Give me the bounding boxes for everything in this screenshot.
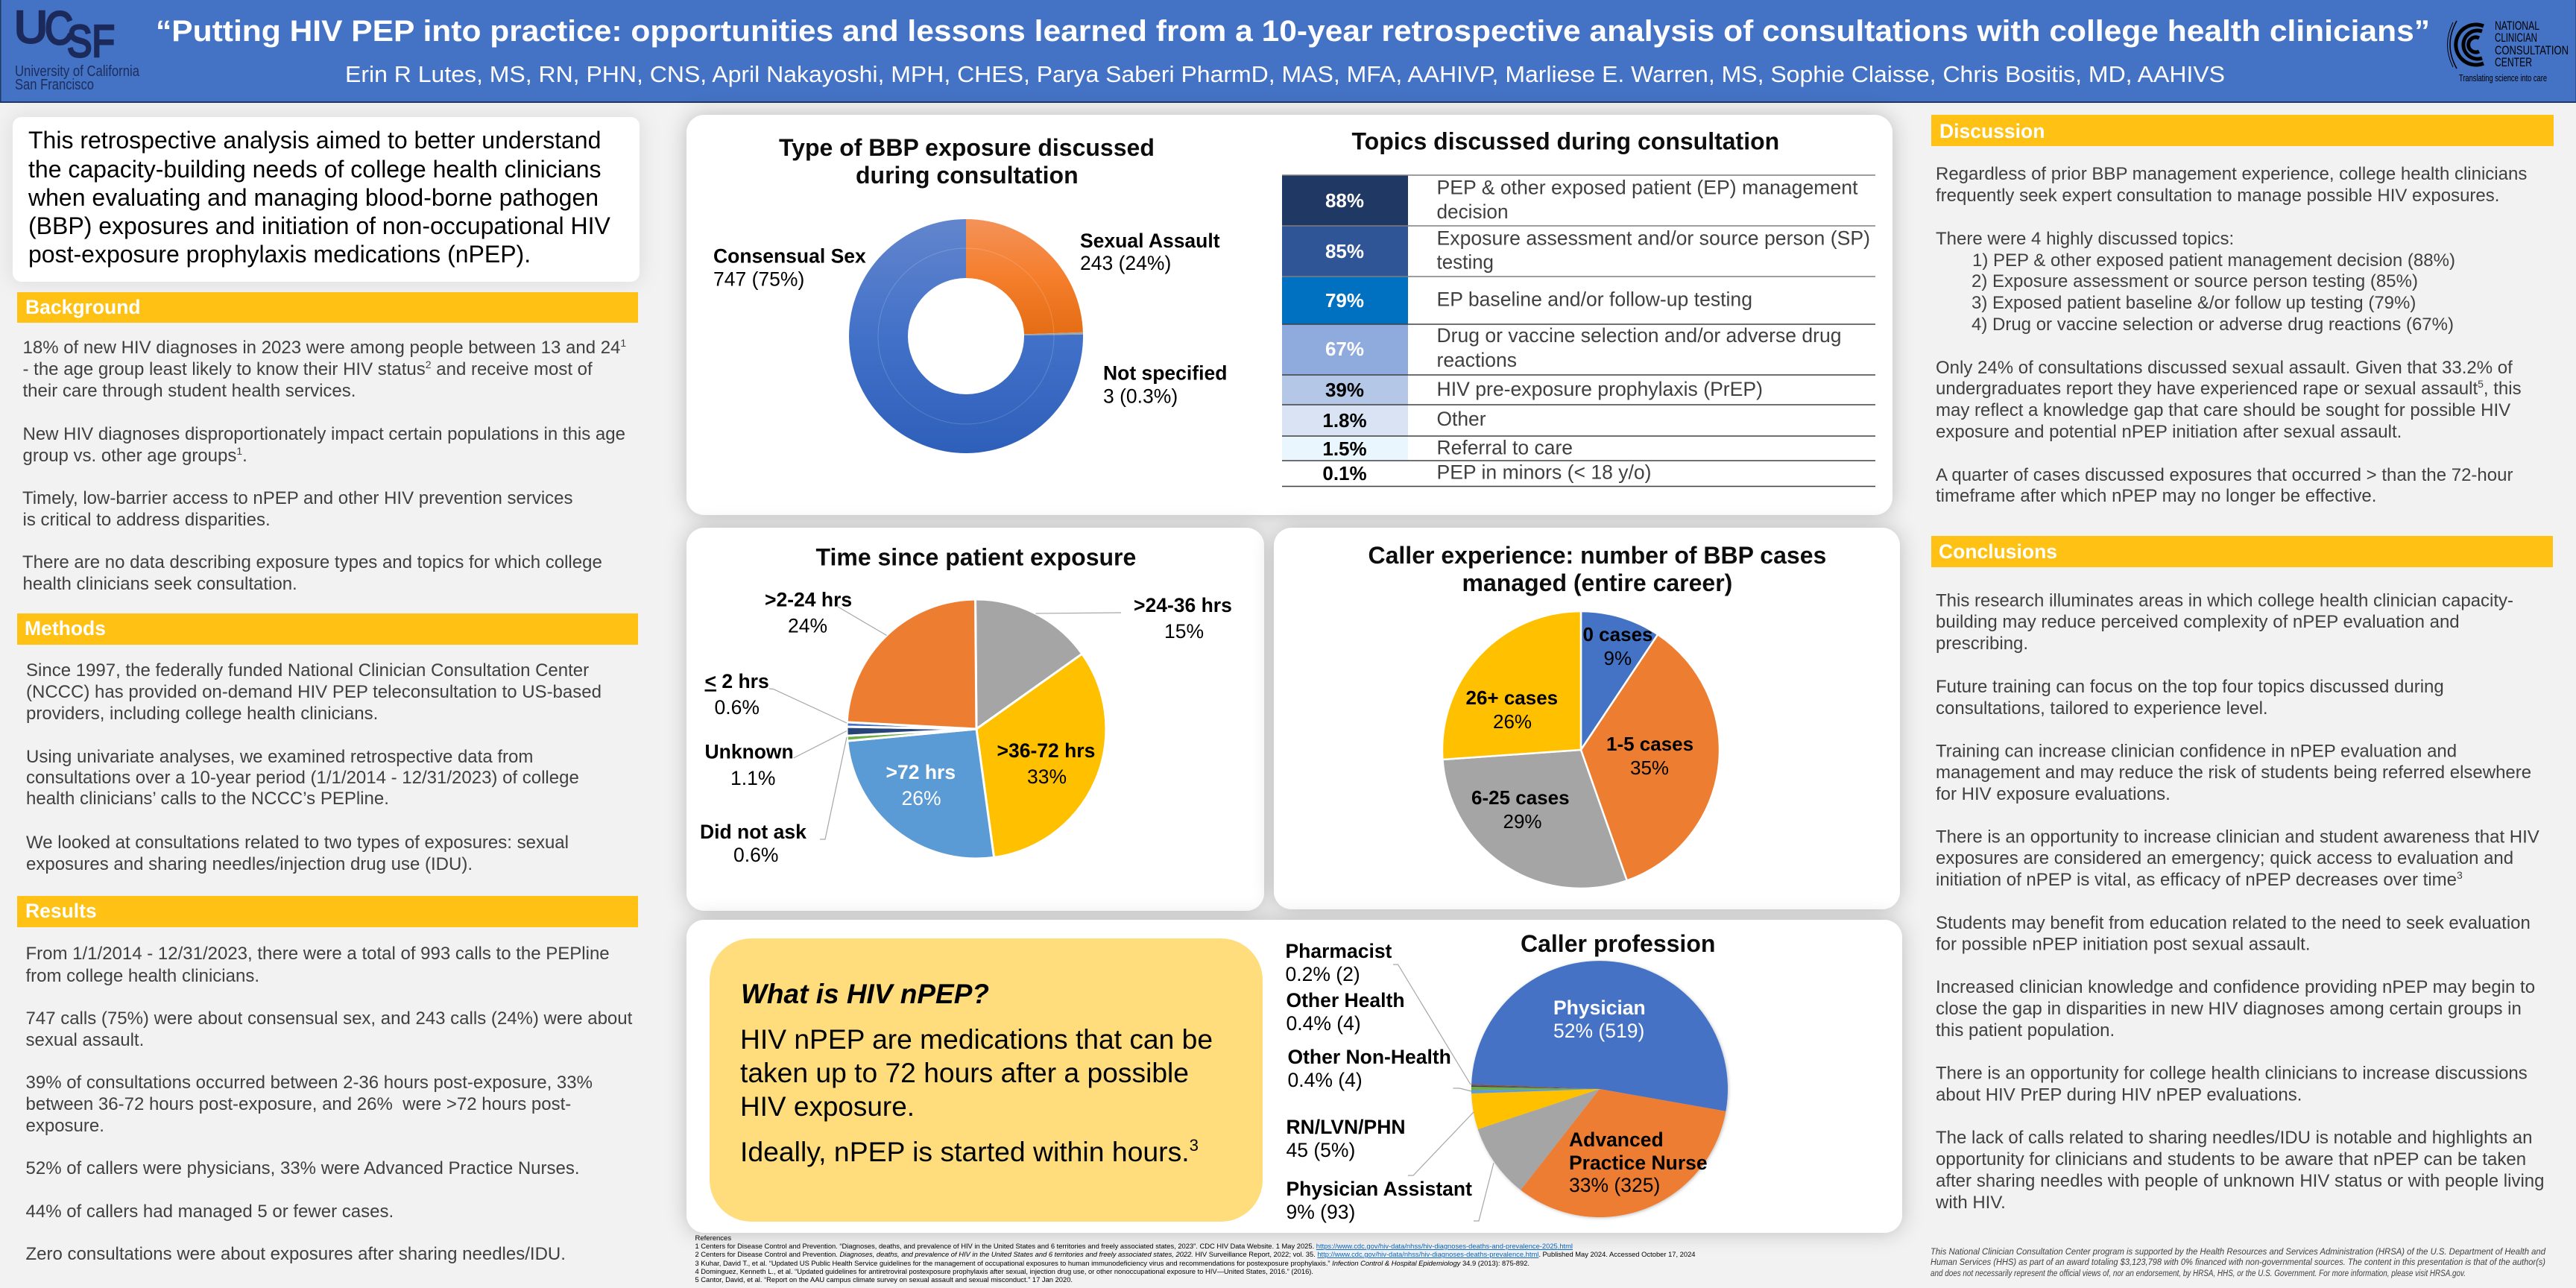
text block: discussion: undergraduates report they have experienced rape or sexual assault bbox=[1936, 379, 2478, 399]
text block: background: 1 bbox=[236, 445, 242, 457]
text block: conclusions: initiation of nPEP is vital, as efficacy of nPEP decreases over time bbox=[1936, 870, 2457, 890]
label: 6-25 cases: 29% bbox=[1503, 810, 1542, 833]
label: other health: 0.4% (4) bbox=[1287, 1012, 1361, 1035]
text block: conclusions: prescribing. bbox=[1936, 634, 2028, 654]
text block: conclusions bbox=[1935, 590, 2544, 1213]
label: 0 cases: 0 cases bbox=[1583, 623, 1652, 645]
panel: exposure type and topics bbox=[686, 115, 1892, 515]
label: over 24 to 36 hours: >24-36 hrs bbox=[1134, 594, 1232, 616]
panel: study aim: the capacity-building needs of college health clinicians bbox=[28, 156, 601, 183]
text block: methods: consultations over a 10-year period (1/1/2014 - 12/31/2023) of college bbox=[26, 768, 579, 788]
heading: results: Results bbox=[25, 900, 97, 922]
label: consensual sex: Consensual Sex bbox=[713, 244, 866, 267]
label: 1-5 cases: 35% bbox=[1630, 757, 1669, 779]
label: physician assistant: 9% (93) bbox=[1287, 1201, 1355, 1223]
table: topics discussed: Referral to care bbox=[1437, 437, 1573, 459]
label: 26+ cases bbox=[1465, 686, 1558, 733]
label: sexual assault bbox=[1080, 230, 1220, 274]
authors: Erin R Lutes, MS, RN, PHN, CNS, April Nakayoshi, MPH, CHES, Parya Saberi PharmD, MAS, MFA, AAHIVP, Marliese E. Warren, MS, Sophie Claisse, Chris Bositis, MD, AAHIVS bbox=[345, 61, 2225, 87]
text block: results: between 36-72 hours post-exposure, and 26% were >72 hours post- bbox=[25, 1094, 571, 1114]
label: physician bbox=[1553, 997, 1646, 1042]
heading: caller experience: managed (entire career) bbox=[1462, 569, 1732, 596]
text block: conclusions: Students may benefit from education related to the need to seek evaluation bbox=[1936, 913, 2531, 933]
table: topics discussed: 1.8% bbox=[1322, 409, 1367, 432]
callout: what is HIV nPEP: Ideally, nPEP is started within hours. bbox=[740, 1137, 1185, 1167]
heading: discussion bbox=[1931, 115, 2554, 146]
text block: discussion: , this bbox=[2484, 379, 2522, 399]
pie chart: caller experience bbox=[1442, 611, 1720, 888]
heading: conclusions: Conclusions bbox=[1939, 540, 2057, 563]
label: RN/LVN/PHN: 45 (5%) bbox=[1287, 1139, 1355, 1161]
text block: conclusions: consultations, tailored to experience level. bbox=[1936, 698, 2268, 719]
label: over 72 hours: 26% bbox=[902, 787, 941, 809]
label: 26+ cases: 26+ cases bbox=[1465, 686, 1558, 709]
text block: results: 52% of callers were physicians, 33% were Advanced Practice Nurses. bbox=[25, 1158, 580, 1178]
table: topics discussed: 88% bbox=[1325, 189, 1364, 212]
table: topics discussed: 67% bbox=[1325, 338, 1364, 360]
table: topics discussed: PEP & other exposed patient (EP) management bbox=[1437, 176, 1858, 198]
text block: background: 1 bbox=[620, 337, 626, 349]
text block: background: . bbox=[242, 446, 247, 466]
leader lines: caller profession bbox=[1393, 965, 1494, 1221]
label: not specified: 3 (0.3%) bbox=[1103, 385, 1178, 407]
text block: discussion: 5 bbox=[2478, 378, 2484, 390]
label: 26+ cases: 26% bbox=[1493, 710, 1532, 733]
text block: conclusions: opportunity for clinicians and students to be aware that nPEP can be taken bbox=[1936, 1149, 2526, 1169]
panel: study aim: post-exposure prophylaxis medications (nPEP). bbox=[28, 241, 531, 268]
label: other non-health bbox=[1288, 1046, 1451, 1091]
text block: discussion: timeframe after which nPEP may no longer be effective. bbox=[1936, 486, 2376, 506]
label: over 72 hours bbox=[886, 761, 956, 809]
heading: background bbox=[17, 292, 638, 323]
logo: UCSF: SF bbox=[67, 16, 115, 66]
label: advanced practice nurse: 33% (325) bbox=[1569, 1174, 1660, 1196]
text block: results: exposure. bbox=[25, 1116, 104, 1136]
table: topics discussed: reactions bbox=[1437, 349, 1517, 371]
label: other health bbox=[1287, 989, 1405, 1035]
label: other non-health: Other Non-Health bbox=[1288, 1046, 1451, 1068]
heading: caller experience: Caller experience: number of BBP cases bbox=[1368, 542, 1826, 569]
text block: conclusions: Increased clinician knowledge and confidence providing nPEP may begin to bbox=[1936, 977, 2535, 997]
label: unknown bbox=[705, 741, 794, 789]
panel: study aim: when evaluating and managing blood-borne pathogen bbox=[28, 184, 599, 211]
table: topics discussed: Drug or vaccine selection and/or adverse drug bbox=[1437, 324, 1841, 347]
label: 1-5 cases bbox=[1606, 733, 1693, 779]
heading: exposure type bbox=[779, 134, 1155, 189]
table: topics discussed: 0.1% bbox=[1322, 462, 1367, 484]
label: pharmacist bbox=[1285, 940, 1392, 985]
text block: discussion: A quarter of cases discussed exposures that occurred > than the 72-hour bbox=[1936, 465, 2513, 485]
table: topics discussed: 79% bbox=[1325, 289, 1364, 312]
pie chart: caller profession bbox=[1471, 961, 1728, 1217]
label: consensual sex bbox=[713, 244, 866, 291]
panel: study aim: (BBP) exposures and initiation of non-occupational HIV bbox=[28, 212, 611, 239]
funding disclaimer: and does not necessarily represent the official views of, nor an endorsement, by HRSA, HHS, or the U.S. Government. For more information, please visit HRSA.gov. bbox=[1931, 1269, 2466, 1278]
text block: conclusions: 3 bbox=[2457, 869, 2463, 881]
text block: background: Timely, low-barrier access to nPEP and other HIV prevention services bbox=[22, 488, 573, 508]
label: sexual assault: 243 (24%) bbox=[1080, 252, 1171, 274]
heading: discussion: Discussion bbox=[1939, 120, 2045, 142]
funding disclaimer: Human Services (HHS) as part of an award totaling $3,123,798 with 0% financed with non-governmental sources. The content in this presentation is that of the author(s) bbox=[1931, 1258, 2545, 1267]
text block: background: and receive most of bbox=[432, 359, 593, 379]
text block: results: 747 calls (75%) were about consensual sex, and 243 calls (24%) were about bbox=[25, 1008, 633, 1029]
text block: methods bbox=[26, 660, 602, 874]
text block: methods: health clinicians’ calls to the NCCC’s PEPline. bbox=[26, 789, 389, 809]
text block: results: from college health clinicians. bbox=[25, 966, 259, 986]
table: topics discussed: Other bbox=[1437, 408, 1486, 430]
label: over 24 to 36 hours bbox=[1134, 594, 1232, 643]
text block: results: 44% of callers had managed 5 or fewer cases. bbox=[25, 1202, 394, 1222]
text block: results bbox=[25, 944, 633, 1264]
label: 2 hours or less bbox=[705, 670, 769, 719]
label: other health: Other Health bbox=[1287, 989, 1405, 1011]
text block: discussion: exposure and potential nPEP initiation after sexual assault. bbox=[1936, 422, 2402, 442]
funding disclaimer bbox=[1931, 1248, 2546, 1278]
text block: results: 39% of consultations occurred between 2-36 hours post-exposure, 33% bbox=[25, 1073, 593, 1093]
text block: discussion: 1) PEP & other exposed patient management decision (88%) bbox=[1972, 250, 2455, 271]
heading: caller profession: Caller profession bbox=[1521, 930, 1715, 957]
heading: methods bbox=[17, 613, 638, 645]
references: 1 Centers for Disease Control and Prevention. “Diagnoses, deaths, and prevalence of HIV in the United States and 6 territories and freely associated states, 2023”. CDC HIV Data Website. 1 May 2025. https://www.cdc.gov/hiv-data/nhss/hiv-diagnoses-deaths-and-prevalence-2025.html bbox=[695, 1243, 1573, 1251]
label: physician assistant bbox=[1287, 1178, 1472, 1223]
label: not specified bbox=[1103, 362, 1227, 407]
text block: discussion bbox=[1936, 164, 2527, 506]
label: physician: Physician bbox=[1553, 997, 1646, 1019]
logo: National Clinician Consultation Center: CLINICIAN bbox=[2495, 31, 2537, 45]
text block: conclusions: Future training can focus on the top four topics discussed during bbox=[1936, 677, 2444, 697]
references: 4 Dominguez, Kenneth L., et al. “Updated guidelines for antiretroviral postexposure prophylaxis after sexual, injection drug use, or other nonoccupational exposure to HIV—United States, 2016.” (2016). bbox=[695, 1268, 1313, 1276]
funding disclaimer: This National Clinician Consultation Center program is supported by the Health Resources and Services Administration (HRSA) of the U.S. Department of Health and bbox=[1931, 1248, 2546, 1257]
text block: results: From 1/1/2014 - 12/31/2023, there were a total of 993 calls to the PEPline bbox=[25, 944, 610, 964]
heading: results bbox=[17, 896, 638, 927]
label: unknown: Unknown bbox=[705, 741, 794, 763]
label: consensual sex: 747 (75%) bbox=[713, 268, 804, 291]
heading: exposure type: during consultation bbox=[856, 162, 1079, 189]
panel: conclusions bbox=[1931, 536, 2553, 1213]
label: physician assistant: Physician Assistant bbox=[1287, 1178, 1472, 1200]
label: did not ask: 0.6% bbox=[733, 844, 778, 866]
panel: methods bbox=[17, 613, 638, 874]
text block: background: their care through student health services. bbox=[22, 381, 356, 401]
table: topics discussed: decision bbox=[1437, 201, 1509, 223]
text block: conclusions: close the gap in disparities in new HIV diagnoses among certain groups in bbox=[1936, 999, 2522, 1019]
text block: conclusions: There is an opportunity to increase clinician and student awareness that HIV bbox=[1936, 827, 2539, 847]
table: topics discussed bbox=[1282, 175, 1875, 486]
text block: conclusions: with HIV. bbox=[1935, 1193, 2006, 1213]
panel: results bbox=[17, 896, 638, 1264]
text block: discussion: may reflect a knowledge gap that care should be sought for possible HIV bbox=[1936, 400, 2510, 420]
text block: results: sexual assault. bbox=[25, 1030, 144, 1050]
panel: nPEP definition and caller profession bbox=[686, 920, 1902, 1233]
panel: time since patient exposure bbox=[686, 528, 1264, 911]
label: over 36 to 72 hours: >36-72 hrs bbox=[997, 739, 1095, 762]
references: 3 Kuhar, David T., et al. “Updated US Public Health Service guidelines for the management of occupational exposures to human immunodeficiency virus and recommendations for postexposure prophylaxis.” Infection Control & Hospital Epidemiology 34.9 (2013): 875-892. bbox=[695, 1260, 1530, 1268]
table: topics discussed: 1.5% bbox=[1322, 438, 1367, 460]
text block: background: There are no data describing exposure types and topics for which college bbox=[22, 552, 602, 572]
text block: conclusions: The lack of calls related to sharing needles/IDU is notable and highlights an bbox=[1936, 1128, 2532, 1148]
callout: what is HIV nPEP: HIV nPEP are medications that can be bbox=[740, 1024, 1213, 1055]
label: 2 hours or less: < 2 hrs bbox=[705, 670, 769, 692]
label: advanced practice nurse: Practice Nurse bbox=[1569, 1152, 1708, 1174]
text block: conclusions: building may reduce perceived complexity of nPEP evaluation and bbox=[1936, 612, 2460, 632]
label: 0 cases bbox=[1583, 623, 1652, 669]
donut chart: exposure type bbox=[849, 219, 1083, 453]
title: “Putting HIV PEP into practice: opportunities and lessons learned from a 10-year retrospective analysis of consultations with college health clinicians” bbox=[156, 15, 2430, 48]
text block: background: 2 bbox=[426, 359, 432, 370]
pie chart: time since exposure bbox=[847, 599, 1106, 859]
heading: time since exposure: Time since patient exposure bbox=[815, 544, 1136, 571]
table: topics discussed: 39% bbox=[1325, 379, 1364, 401]
text block: methods: Since 1997, the federally funded National Clinician Consultation Center bbox=[26, 660, 589, 681]
leader lines: time since exposure bbox=[769, 607, 1121, 839]
label: 6-25 cases: 6-25 cases bbox=[1471, 786, 1570, 809]
heading: topics: Topics discussed during consultation bbox=[1352, 128, 1779, 155]
label: over 2 to 24 hours bbox=[765, 589, 852, 637]
label: over 24 to 36 hours: 15% bbox=[1164, 620, 1204, 643]
callout: what is HIV nPEP bbox=[710, 938, 1263, 1222]
label: 0 cases: 9% bbox=[1604, 647, 1632, 669]
label: 2 hours or less: 0.6% bbox=[714, 696, 760, 719]
label: did not ask: Did not ask bbox=[700, 821, 806, 843]
label: physician: 52% (519) bbox=[1553, 1020, 1644, 1042]
text block: methods: (NCCC) has provided on-demand HIV PEP teleconsultation to US-based bbox=[26, 682, 602, 702]
logo: National Clinician Consultation Center bbox=[2448, 19, 2569, 83]
heading: exposure type: Type of BBP exposure discussed bbox=[779, 134, 1155, 161]
table: topics discussed: HIV pre-exposure prophylaxis (PrEP) bbox=[1437, 378, 1763, 400]
callout: what is HIV nPEP: 3 bbox=[1190, 1136, 1199, 1155]
text block: discussion: Regardless of prior BBP management experience, college health clinicians bbox=[1936, 164, 2527, 184]
references bbox=[695, 1234, 1696, 1284]
table: topics discussed: EP baseline and/or follow-up testing bbox=[1437, 288, 1752, 310]
panel: caller experience bbox=[1274, 528, 1900, 909]
text block: background bbox=[22, 337, 626, 594]
panel: background bbox=[17, 292, 638, 594]
panel: study aim: This retrospective analysis aimed to better understand bbox=[28, 127, 601, 154]
callout: what is HIV nPEP: HIV exposure. bbox=[740, 1091, 915, 1122]
heading: conclusions bbox=[1931, 536, 2553, 567]
text block: discussion: frequently seek expert consultation to manage possible HIV exposures. bbox=[1936, 186, 2499, 206]
logo: UCSF: C bbox=[45, 3, 73, 54]
heading: caller experience bbox=[1368, 542, 1826, 596]
table: topics discussed: PEP in minors (< 18 y/o) bbox=[1437, 461, 1652, 483]
table: topics discussed: 85% bbox=[1325, 240, 1364, 262]
text block: background: health clinicians seek consultation. bbox=[22, 574, 297, 594]
text block: conclusions: Training can increase clinician confidence in nPEP evaluation and bbox=[1936, 741, 2457, 762]
text block: methods: We looked at consultations related to two types of exposures: sexual bbox=[26, 833, 569, 853]
logo: UCSF: U bbox=[14, 2, 48, 52]
text block: discussion: There were 4 highly discussed topics: bbox=[1936, 229, 2234, 249]
logo: UCSF: San Francisco bbox=[15, 77, 94, 93]
text block: results: Zero consultations were about exposures after sharing needles/IDU. bbox=[25, 1244, 566, 1264]
text block: discussion: 2) Exposure assessment or source person testing (85%) bbox=[1972, 271, 2418, 291]
label: pharmacist: Pharmacist bbox=[1285, 940, 1392, 962]
logo: UCSF bbox=[14, 2, 140, 93]
heading: methods: Methods bbox=[25, 617, 106, 640]
label: RN/LVN/PHN: RN/LVN/PHN bbox=[1287, 1116, 1405, 1138]
text block: conclusions: management and may reduce the risk of students being referred elsewhere bbox=[1936, 763, 2531, 783]
text block: methods: Using univariate analyses, we examined retrospective data from bbox=[26, 747, 533, 767]
panel: study aim bbox=[13, 117, 640, 282]
text block: background: New HIV diagnoses disproportionately impact certain populations in this age bbox=[22, 424, 625, 444]
logo: National Clinician Consultation Center: CENTER bbox=[2495, 55, 2532, 69]
text block: conclusions: this patient population. bbox=[1936, 1020, 2115, 1041]
label: RN/LVN/PHN bbox=[1287, 1116, 1405, 1161]
text block: conclusions: This research illuminates areas in which college health clinician capacity- bbox=[1936, 590, 2513, 611]
label: sexual assault: Sexual Assault bbox=[1080, 230, 1220, 252]
label: other non-health: 0.4% (4) bbox=[1288, 1069, 1363, 1091]
text block: background: group vs. other age groups bbox=[22, 446, 236, 466]
label: advanced practice nurse: Advanced bbox=[1569, 1128, 1664, 1151]
label: over 36 to 72 hours: 33% bbox=[1027, 765, 1067, 788]
logo: National Clinician Consultation Center: NATIONAL bbox=[2495, 19, 2539, 33]
label: pharmacist: 0.2% (2) bbox=[1285, 963, 1360, 985]
text block: methods: exposures and sharing needles/injection drug use (IDU). bbox=[26, 854, 473, 874]
references: 5 Cantor, David, et al. “Report on the AAU campus climate survey on sexual assault and sexual misconduct.” 17 Jan 2020. bbox=[695, 1276, 1073, 1284]
text block: discussion: 4) Drug or vaccine selection or adverse drug reactions (67%) bbox=[1972, 315, 2454, 335]
text block: conclusions: for HIV exposure evaluations. bbox=[1936, 784, 2171, 804]
label: 6-25 cases bbox=[1471, 786, 1570, 833]
text block: background: - the age group least likely to know their HIV status bbox=[22, 359, 426, 379]
callout: what is HIV nPEP: taken up to 72 hours after a possible bbox=[740, 1058, 1189, 1088]
text block: discussion: Only 24% of consultations discussed sexual assault. Given that 33.2% of bbox=[1936, 358, 2513, 378]
heading: background: Background bbox=[25, 296, 141, 318]
references: 2 Centers for Disease Control and Prevention. Diagnoses, deaths, and prevalence of HIV in the United States and 6 territories and freely associated states, 2022. HIV Surveillance Report, 2022; vol. 35. http://www.cdc.gov/hiv-data/nhss/hiv-diagnoses-deaths-prevalence.html. Published May 2024. Accessed October 17, 2024 bbox=[695, 1251, 1696, 1259]
callout: what is HIV nPEP: What is HIV nPEP? bbox=[741, 979, 989, 1009]
label: over 36 to 72 hours bbox=[997, 739, 1095, 788]
label: over 2 to 24 hours: 24% bbox=[788, 614, 827, 637]
label: did not ask bbox=[700, 821, 806, 866]
table: topics discussed: testing bbox=[1437, 250, 1494, 273]
label: 1-5 cases: 1-5 cases bbox=[1606, 733, 1693, 755]
panel: discussion bbox=[1931, 115, 2554, 506]
text block: conclusions: after sharing needles with people of unknown HIV status or with people living bbox=[1936, 1171, 2544, 1191]
text block: conclusions: about HIV PrEP during HIV nPEP evaluations. bbox=[1936, 1085, 2302, 1105]
label: over 2 to 24 hours: >2-24 hrs bbox=[765, 589, 852, 611]
text block: conclusions: exposures are considered an emergency; quick access to evaluation and bbox=[1936, 848, 2513, 868]
logo: UCSF: University of California bbox=[15, 63, 140, 80]
text block: methods: providers, including college health clinicians. bbox=[26, 704, 378, 724]
label: unknown: 1.1% bbox=[730, 767, 775, 789]
table: topics discussed: Exposure assessment and/or source person (SP) bbox=[1437, 227, 1870, 249]
text block: discussion: 3) Exposed patient baseline &/or follow up testing (79%) bbox=[1972, 293, 2416, 313]
text block: background: 18% of new HIV diagnoses in 2023 were among people between 13 and 24 bbox=[22, 338, 620, 358]
text block: conclusions: for possible nPEP initiation post sexual assault. bbox=[1936, 935, 2311, 954]
panel: poster header bbox=[0, 0, 2576, 102]
label: over 72 hours: >72 hrs bbox=[886, 761, 956, 783]
label: advanced practice nurse bbox=[1569, 1128, 1708, 1196]
text block: background: is critical to address disparities. bbox=[22, 510, 271, 530]
references: References bbox=[695, 1234, 731, 1243]
label: not specified: Not specified bbox=[1103, 362, 1227, 385]
text block: conclusions: There is an opportunity for college health clinicians to increase discussions bbox=[1936, 1063, 2528, 1084]
